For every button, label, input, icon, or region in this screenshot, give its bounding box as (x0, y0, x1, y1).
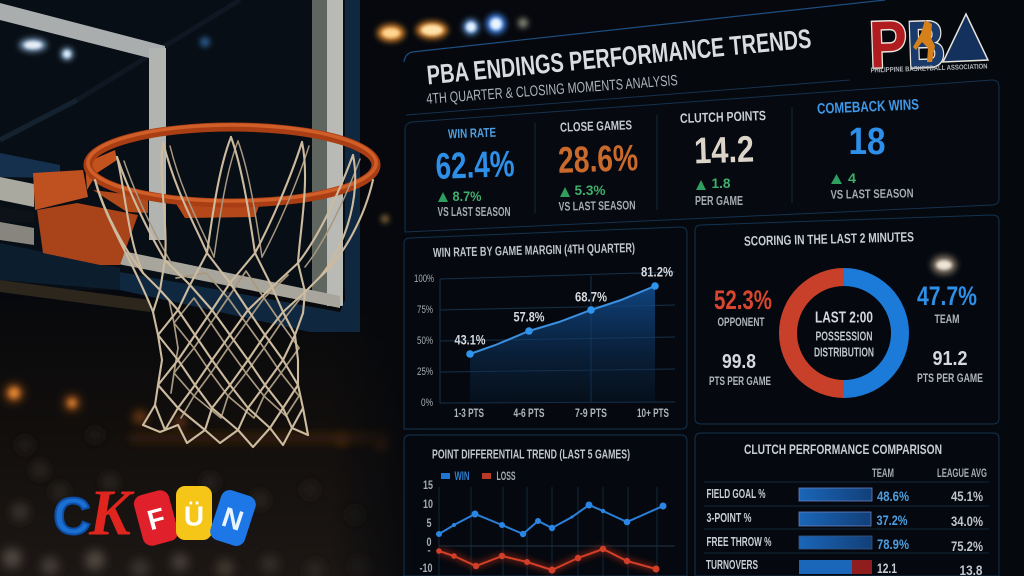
row: field goal: FIELD GOAL % (706, 487, 766, 501)
crowd bokeh (2, 428, 369, 576)
row: free throw (706, 535, 983, 554)
team stats: 91.2 (932, 348, 968, 370)
KPI: clutch points (680, 108, 766, 208)
team stats: 47.7% (917, 281, 977, 311)
KPI: close games: VS LAST SEASON (558, 198, 636, 214)
row: field goal: 45.1% (951, 488, 983, 504)
row: 3-point (706, 511, 983, 529)
warm arena lights (6, 215, 421, 576)
backboard (0, 0, 360, 332)
table header (872, 466, 987, 480)
donut chart: POSSESSION (816, 328, 872, 344)
chart title: POINT DIFFERENTIAL TREND (LAST 5 GAMES) (432, 446, 630, 462)
logo tile N (208, 488, 258, 548)
panel: KPI row (405, 80, 999, 232)
KPI: close games: 28.6% (557, 137, 639, 181)
KPI: win rate: WIN RATE (448, 125, 496, 141)
donut chart: LAST 2:00 (815, 310, 873, 326)
row: 3-point: 3-POINT % (706, 511, 752, 525)
table header: LEAGUE AVG (937, 466, 987, 480)
donut chart (788, 277, 900, 389)
panel heading: SCORING IN THE LAST 2 MINUTES (744, 229, 914, 249)
line chart (414, 264, 675, 420)
KPI: clutch points: 1.8 (712, 175, 731, 191)
line chart: -10 (420, 561, 433, 575)
logo letter C: C (53, 488, 91, 546)
line chart: 100% (414, 273, 434, 285)
line chart: 5 (426, 516, 432, 530)
logo letter P: P (868, 6, 908, 82)
KPI: comeback wins (817, 96, 919, 202)
panel: header (404, 0, 1024, 576)
rim bracket (33, 150, 260, 265)
team stats: PTS PER GAME (917, 371, 983, 385)
line chart: 81.2% (641, 264, 673, 280)
line chart: 0% (421, 397, 433, 409)
line chart: 7-9 PTS (575, 408, 607, 420)
title: PBA ENDINGS PERFORMANCE TRENDS (425, 24, 813, 90)
team stats (917, 281, 983, 385)
chart title: WIN RATE BY GAME MARGIN (4TH QUARTER) (433, 240, 635, 260)
donut chart: DISTRIBUTION (814, 344, 874, 360)
KPI: win rate: 62.4% (435, 143, 515, 187)
KPI: win rate: 8.7% (452, 188, 482, 204)
opponent stats: OPPONENT (718, 315, 765, 329)
ceiling lights (19, 14, 528, 60)
team stats: TEAM (934, 312, 960, 326)
legend: WIN (454, 469, 470, 483)
opponent stats: 99.8 (722, 351, 756, 373)
line chart: 57.8% (514, 310, 544, 324)
KPI: clutch points: CLUTCH POINTS (680, 108, 766, 126)
legend (441, 469, 516, 483)
row: turnovers: TURNOVERS (706, 558, 758, 572)
logo player (913, 20, 935, 62)
legend: LOSS (496, 469, 516, 483)
logo tile U (176, 486, 212, 540)
icon: net (95, 137, 373, 447)
row: 3-point: 34.0% (951, 513, 983, 529)
row: turnovers (706, 558, 983, 576)
KPI: clutch points: 14.2 (693, 128, 755, 172)
line chart: 10 (423, 497, 433, 511)
logo triangle A (943, 14, 988, 62)
line chart: 4-6 PTS (514, 408, 545, 420)
logo letter B: B (906, 6, 946, 82)
opponent stats: PTS PER GAME (709, 374, 771, 388)
KPI: close games: CLOSE GAMES (560, 117, 632, 135)
panel: point differential trend (404, 435, 687, 576)
opponent stats: 52.3% (714, 285, 772, 315)
KPI: comeback wins: COMEBACK WINS (817, 96, 919, 118)
KPI: clutch points: PER GAME (695, 194, 743, 208)
row: free throw: 75.2% (951, 538, 983, 554)
row: 3-point: 37.2% (876, 512, 908, 528)
line chart: 43.1% (454, 332, 486, 348)
logo tile U: Ü (184, 500, 204, 532)
panel: clutch performance comparison (695, 433, 999, 576)
line chart: 0 (426, 535, 432, 549)
line chart: 50% (417, 335, 433, 347)
logo letter K: K (88, 476, 135, 550)
row: field goal (706, 487, 983, 504)
row: field goal: 48.6% (877, 488, 909, 504)
KPI: comeback wins: 18 (848, 121, 886, 163)
KPI: win rate (435, 125, 515, 219)
KPI: close games: 5.3% (574, 182, 606, 198)
KPI: win rate: VS LAST SEASON (438, 205, 510, 219)
KPI: comeback wins: VS LAST SEASON (830, 186, 914, 202)
logo tile F (132, 488, 180, 548)
arena light behind panel (931, 255, 957, 275)
logo tile N: N (218, 501, 247, 537)
line chart: 1-3 PTS (454, 408, 484, 420)
line chart (420, 478, 675, 576)
line chart: 25% (417, 366, 433, 378)
opponent stats (709, 285, 772, 388)
line chart: - (427, 546, 431, 556)
KPI: comeback wins: 4 (848, 170, 856, 186)
line chart: 68.7% (575, 290, 607, 304)
rim (88, 125, 376, 203)
line chart: 10+ PTS (637, 408, 669, 420)
logo tagline: PHILIPPINE BASKETBALL ASSOCIATION (870, 63, 988, 75)
line chart: 75% (417, 304, 433, 316)
subtitle: 4TH QUARTER & CLOSING MOMENTS ANALYSIS (426, 72, 678, 108)
logo tile F: F (144, 502, 169, 536)
panel heading: CLUTCH PERFORMANCE COMPARISON (744, 441, 942, 457)
table header: TEAM (872, 466, 894, 480)
line chart: 15 (423, 478, 433, 492)
logo: PBA (868, 6, 988, 82)
row: free throw: FREE THROW % (706, 535, 772, 549)
row: turnovers: 12.1 (877, 560, 897, 576)
row: free throw: 78.9% (877, 536, 909, 552)
panel: win rate by game margin (404, 227, 687, 429)
KPI: close games (557, 117, 639, 214)
logo: OK FUN (53, 476, 258, 550)
panel: scoring in last 2 minutes (695, 215, 999, 424)
